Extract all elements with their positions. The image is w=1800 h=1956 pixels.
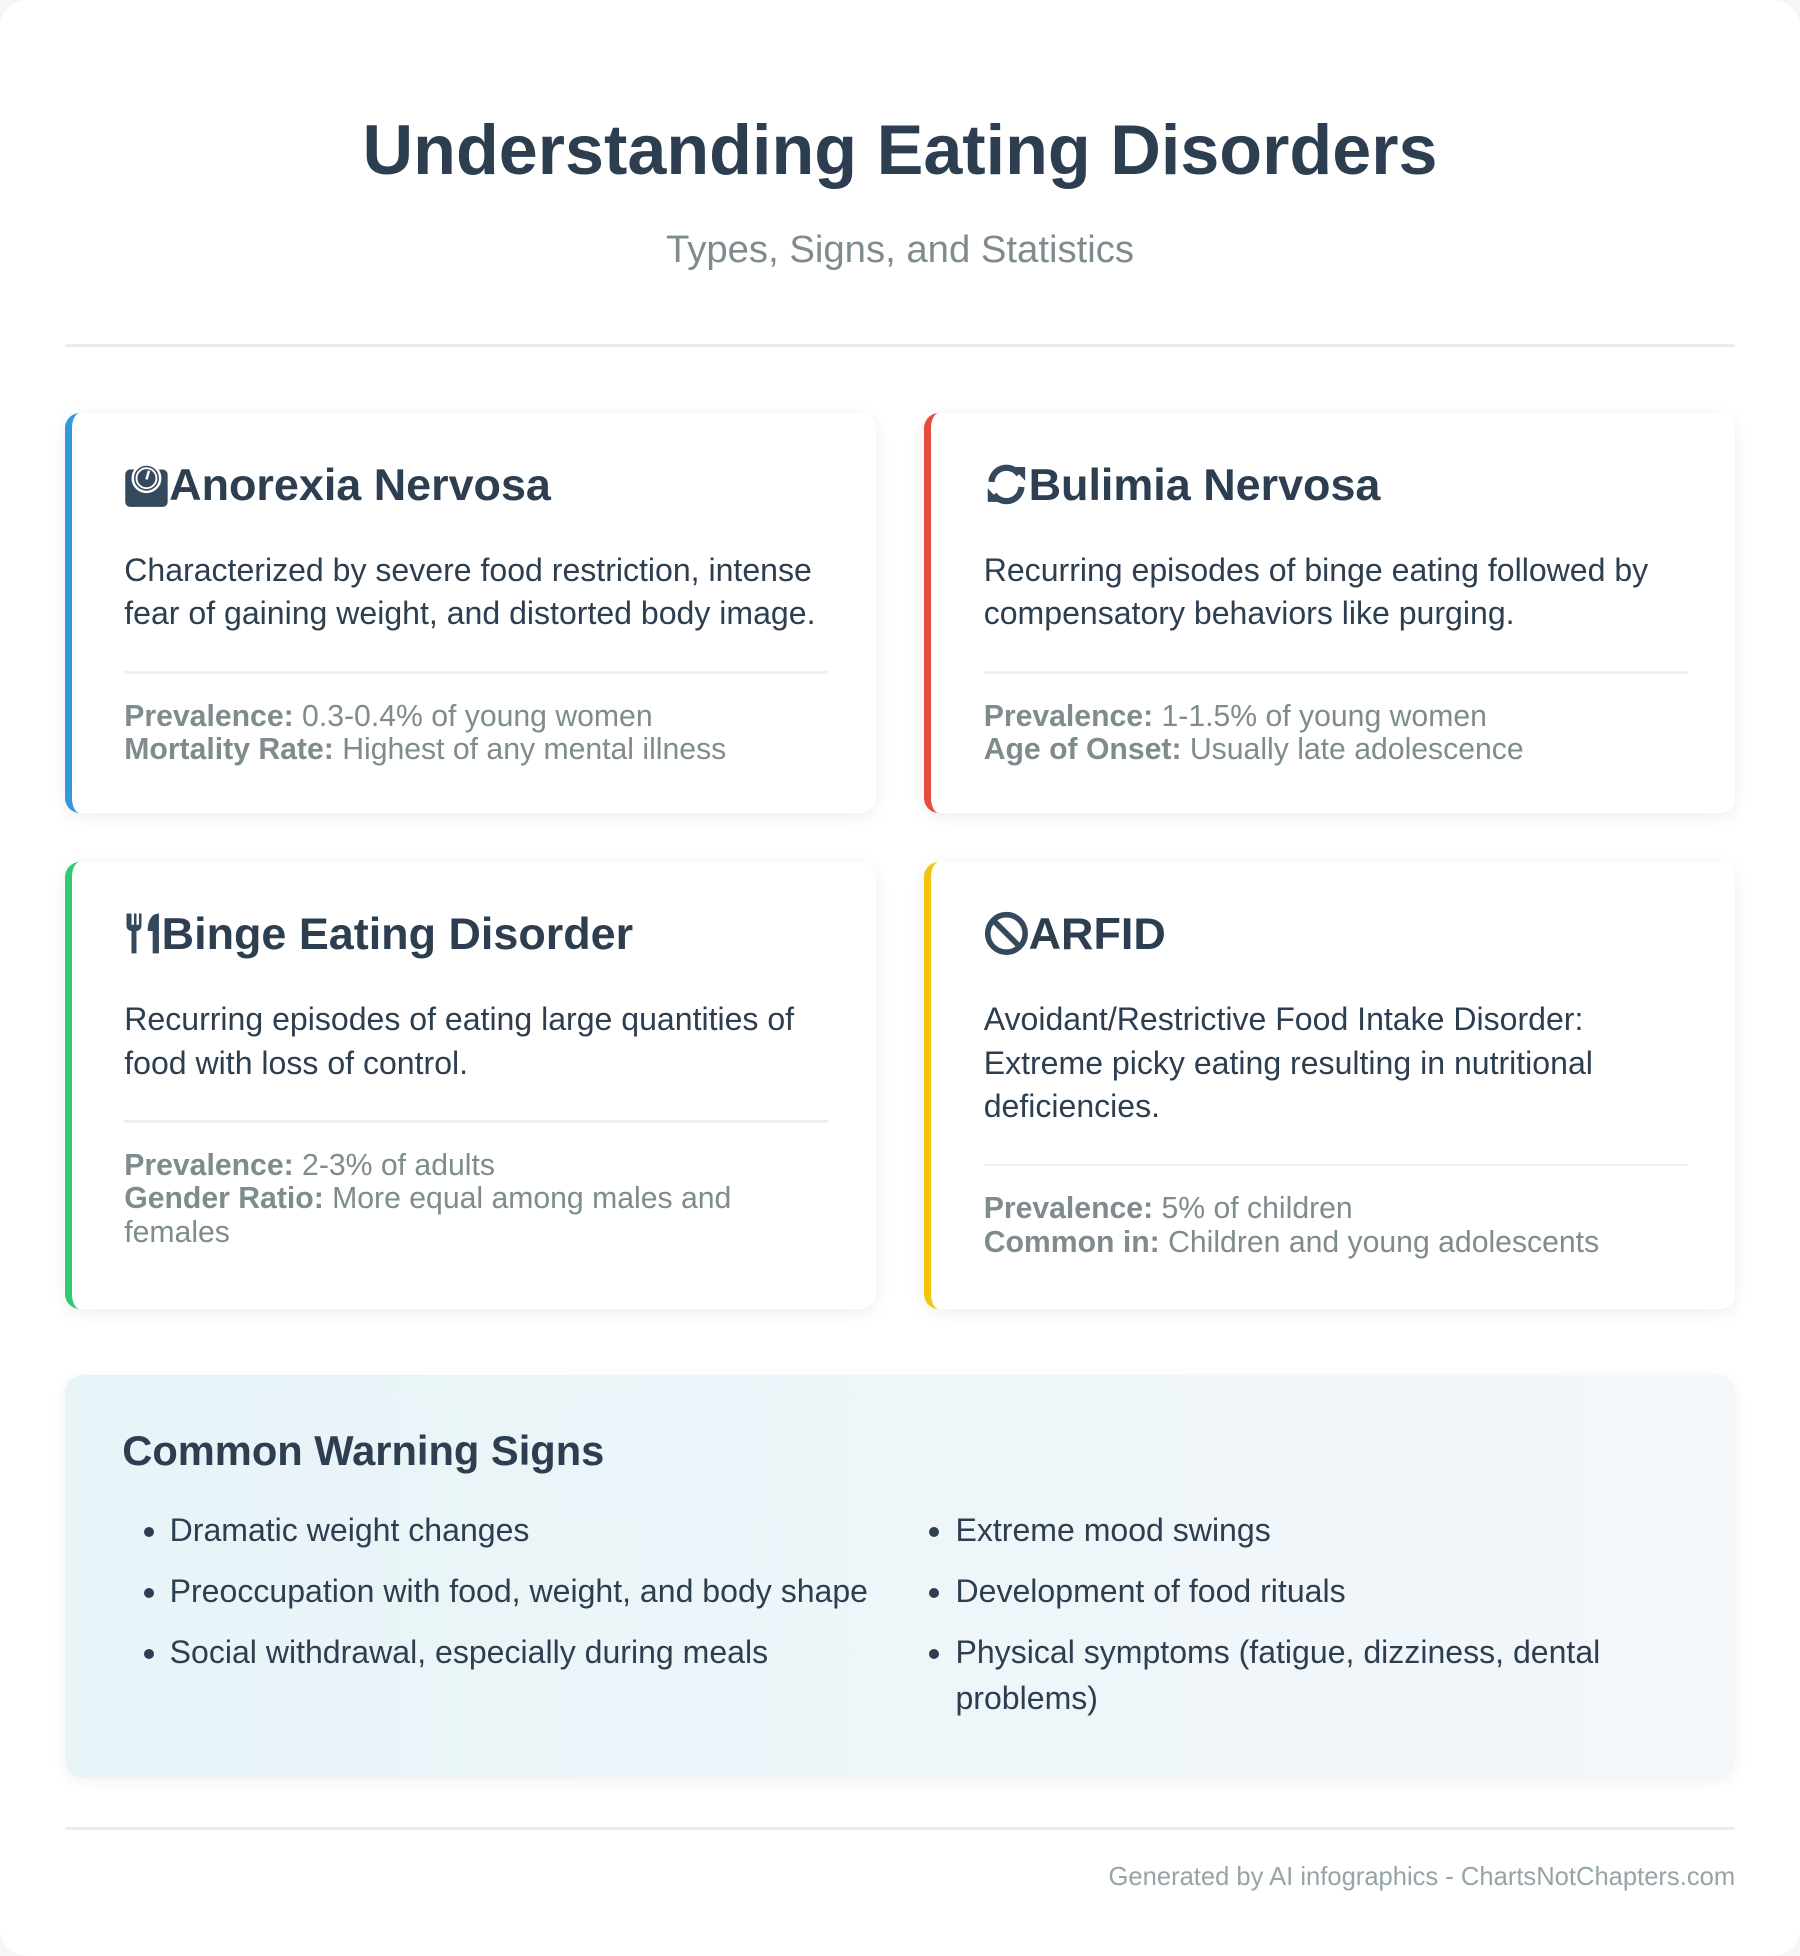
list: warning signs: Dramatic weight changes (170, 1512, 529, 1548)
stats: Common in: Children and young adolescents (984, 1226, 1599, 1259)
description: Avoidant/Restrictive Food Intake Disorder: Extreme picky eating resulting in nutritional deficiencies. (984, 1001, 1593, 1124)
list: warning signs: Preoccupation with food, weight, and body shape (170, 1573, 868, 1609)
list: warning signs (144, 1512, 1600, 1716)
stats (984, 1192, 1599, 1259)
subtitle: Types, Signs, and Statistics (666, 228, 1134, 271)
panel: anorexia (65, 413, 876, 813)
stats: Prevalence: 1-1.5% of young women (984, 700, 1487, 733)
footer: Generated by AI infographics - ChartsNotChapters.com (1109, 1863, 1735, 1891)
panel: binge eating (65, 862, 876, 1309)
heading: binge: Binge Eating Disorder (162, 908, 633, 959)
stats (984, 700, 1524, 766)
title: Understanding Eating Disorders (363, 111, 1437, 189)
stats: Prevalence: 5% of children (984, 1192, 1353, 1225)
list: warning signs: Physical symptoms (fatigue, dizziness, dental problems) (955, 1634, 1600, 1716)
list: warning signs: Development of food rituals (955, 1573, 1346, 1609)
panel: bulimia (924, 413, 1735, 813)
panel: warning signs (65, 1375, 1735, 1778)
stats: Gender Ratio: More equal among males and females (124, 1182, 731, 1249)
panel: ARFID (924, 862, 1735, 1309)
description: Characterized by severe food restriction, intense fear of gaining weight, and distorted body image. (124, 552, 815, 631)
heading: anorexia: Anorexia Nervosa (169, 459, 551, 510)
description: Recurring episodes of binge eating followed by compensatory behaviors like purging. (984, 552, 1648, 631)
stats: Mortality Rate: Highest of any mental illness (124, 733, 726, 766)
list: warning signs: Extreme mood swings (955, 1512, 1271, 1548)
stats: Age of Onset: Usually late adolescence (984, 733, 1524, 766)
description: Recurring episodes of eating large quantities of food with loss of control. (124, 1001, 794, 1081)
stats (124, 1149, 731, 1249)
heading: warning signs: Common Warning Signs (122, 1427, 604, 1474)
heading: bulimia: Bulimia Nervosa (1029, 459, 1380, 510)
list: warning signs: Social withdrawal, especially during meals (170, 1634, 768, 1670)
stats: Prevalence: 2-3% of adults (124, 1149, 495, 1182)
stats: Prevalence: 0.3-0.4% of young women (124, 700, 653, 733)
stats (124, 700, 726, 766)
heading: ARFID: ARFID (1029, 908, 1166, 959)
